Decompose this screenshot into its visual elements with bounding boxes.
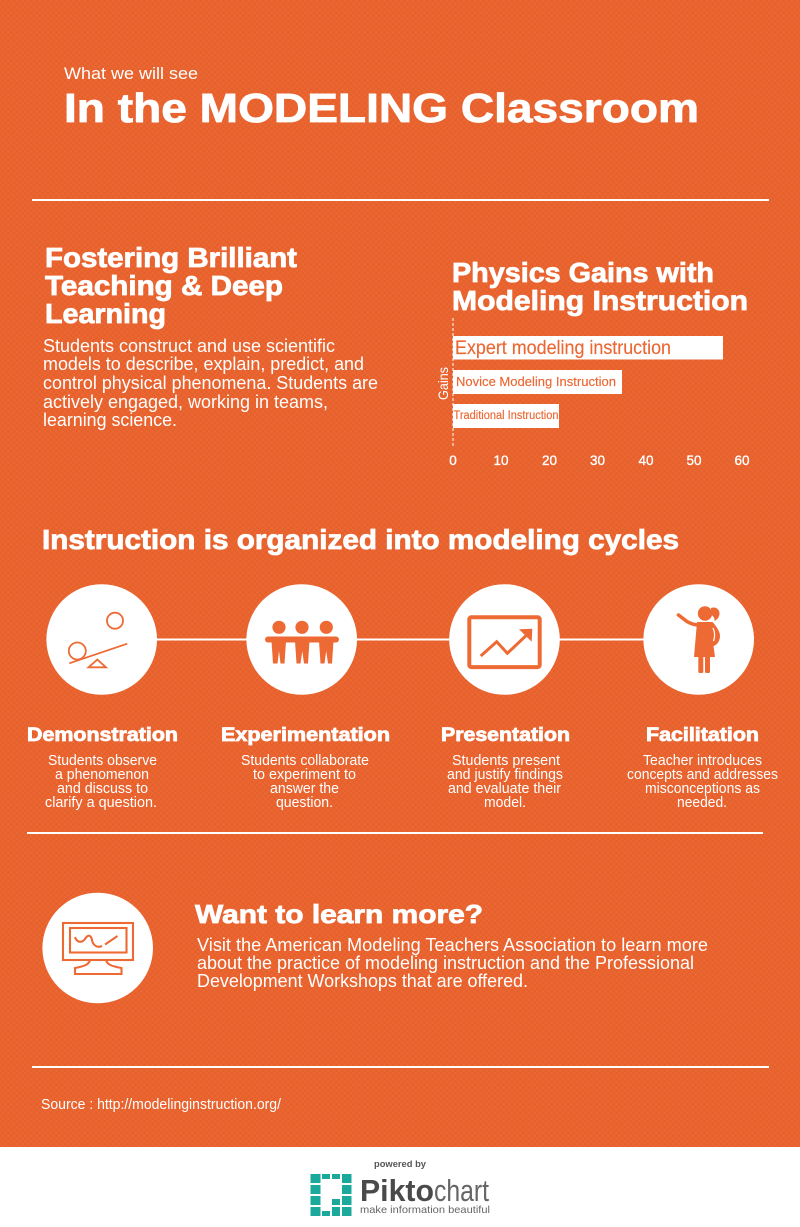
x axis labels: 10 bbox=[493, 453, 509, 468]
tagline: make information beautiful bbox=[360, 1204, 490, 1216]
source line: Source : http://modelinginstruction.org/ bbox=[41, 1096, 282, 1113]
body text: fostering: Students construct and use scientific bbox=[43, 336, 335, 356]
x axis labels: 20 bbox=[542, 453, 557, 468]
description: presentation: and justify findings bbox=[447, 767, 563, 783]
x axis labels: 30 bbox=[590, 453, 605, 468]
description: demonstration: Students observe bbox=[48, 753, 157, 769]
bar chart bbox=[435, 318, 750, 468]
bar: traditional instruction: Traditional Instruction bbox=[454, 410, 558, 422]
panel: want to learn more bbox=[42, 893, 708, 1003]
description: demonstration: a phenomenon bbox=[55, 767, 149, 783]
title block bbox=[64, 64, 699, 131]
description: experimentation: question. bbox=[276, 795, 333, 811]
description: facilitation: Teacher introduces bbox=[643, 753, 762, 769]
description: presentation: model. bbox=[484, 795, 526, 811]
description: experimentation: Students collaborate bbox=[241, 753, 369, 769]
description: facilitation: concepts and addresses bbox=[627, 767, 778, 783]
x axis labels: 40 bbox=[638, 453, 654, 468]
description: presentation bbox=[447, 753, 563, 811]
description: experimentation: to experiment to bbox=[253, 767, 356, 783]
icon: three people bbox=[246, 584, 357, 695]
x axis labels: 0 bbox=[449, 453, 457, 468]
description: facilitation bbox=[627, 753, 778, 811]
description: demonstration: clarify a question. bbox=[45, 795, 157, 811]
logo mark bbox=[310, 1174, 352, 1216]
step: experimentation bbox=[221, 584, 390, 811]
icon: chart on screen bbox=[449, 584, 560, 695]
step: presentation bbox=[441, 584, 570, 811]
heading: fostering brilliant teaching: Teaching & Deep bbox=[45, 270, 283, 301]
bar: novice modeling instruction bbox=[453, 370, 622, 394]
bar: traditional instruction bbox=[453, 404, 559, 428]
chart heading: Modeling Instruction bbox=[452, 285, 748, 316]
body text: learn more: Development Workshops that are offered. bbox=[197, 971, 528, 991]
label: facilitation: Facilitation bbox=[646, 725, 759, 746]
footer: piktochart bbox=[0, 1147, 800, 1227]
description: facilitation: needed. bbox=[677, 795, 727, 811]
body text: learn more bbox=[197, 935, 708, 991]
heading: want to learn more: Want to learn more? bbox=[195, 899, 483, 929]
body text: learn more: Visit the American Modeling Teachers Association to learn more bbox=[197, 935, 708, 955]
logo wordmark bbox=[360, 1173, 489, 1208]
label: demonstration: Demonstration bbox=[27, 725, 178, 746]
heading: fostering brilliant teaching: Fostering Brilliant bbox=[45, 242, 297, 273]
icon: computer monitor bbox=[42, 893, 153, 1003]
cycle connector line bbox=[150, 638, 650, 640]
x axis labels: 50 bbox=[686, 453, 702, 468]
chart heading: Physics Gains with bbox=[452, 257, 714, 288]
icon: seesaw bbox=[46, 584, 157, 695]
description: experimentation: answer the bbox=[270, 781, 339, 797]
step: demonstration bbox=[27, 584, 178, 811]
panel: physics gains chart bbox=[435, 257, 750, 468]
panel: fostering brilliant teaching bbox=[43, 242, 378, 430]
logo wordmark: Pikto bbox=[360, 1173, 434, 1208]
body text: fostering: learning science. bbox=[43, 410, 177, 430]
body text: learn more: about the practice of modeling instruction and the Professional bbox=[197, 953, 694, 973]
body text: fostering: control physical phenomena. Students are bbox=[43, 373, 378, 393]
description: presentation: and evaluate their bbox=[448, 781, 561, 797]
description: demonstration bbox=[45, 753, 157, 811]
axis label: gains: Gains bbox=[435, 367, 451, 400]
subtitle: What we will see bbox=[64, 64, 198, 83]
body text: fostering: actively engaged, working in teams, bbox=[43, 392, 328, 412]
description: presentation: Students present bbox=[452, 753, 560, 769]
bar: novice modeling instruction: Novice Modeling Instruction bbox=[456, 374, 616, 389]
x axis labels: 60 bbox=[734, 453, 750, 468]
logo wordmark: chart bbox=[434, 1173, 489, 1208]
powered by: powered by bbox=[374, 1159, 426, 1169]
main title: In the MODELING Classroom bbox=[64, 85, 699, 131]
heading: fostering brilliant teaching bbox=[45, 242, 297, 329]
description: experimentation bbox=[241, 753, 369, 811]
x axis labels bbox=[449, 453, 750, 468]
label: experimentation: Experimentation bbox=[221, 725, 390, 746]
description: facilitation: misconceptions as bbox=[645, 781, 760, 797]
bar: expert modeling instruction: Expert modeling instruction bbox=[455, 338, 671, 359]
label: presentation: Presentation bbox=[441, 725, 570, 746]
description: demonstration: and discuss to bbox=[57, 781, 148, 797]
body text: fostering bbox=[43, 336, 378, 430]
heading: fostering brilliant teaching: Learning bbox=[45, 298, 166, 329]
icon: teacher pointing bbox=[643, 584, 754, 695]
body text: fostering: models to describe, explain, predict, and bbox=[43, 354, 364, 374]
step: facilitation bbox=[627, 584, 778, 811]
chart heading bbox=[452, 257, 748, 316]
section heading: modeling cycles: Instruction is organized into modeling cycles bbox=[42, 524, 679, 555]
